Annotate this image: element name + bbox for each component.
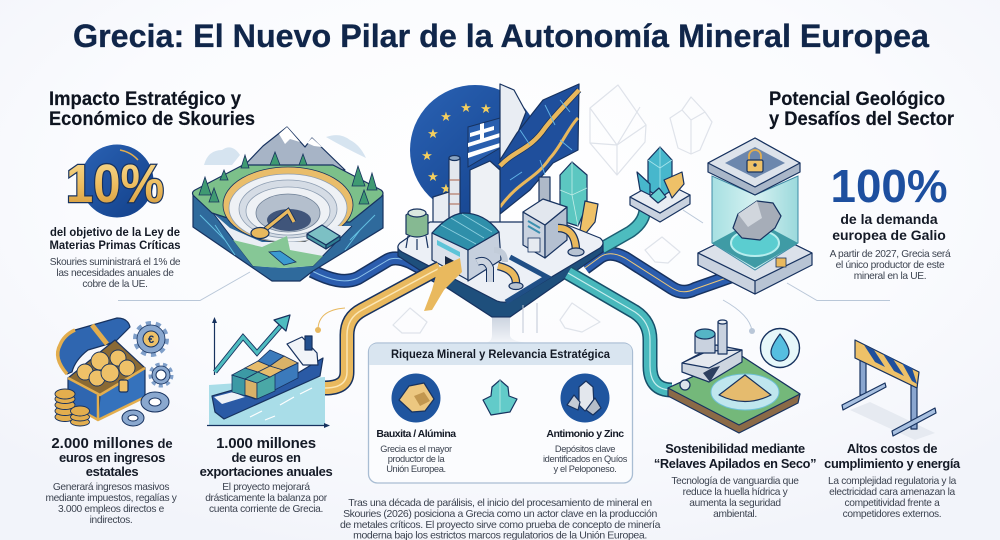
EU stars (421, 100, 492, 196)
coins (77, 350, 135, 386)
pipe: teal to dry stack (568, 273, 672, 390)
glass case (712, 176, 798, 270)
text: galio description: de la demanda (840, 211, 938, 227)
text: 2.000 millones: indirectos. (90, 515, 132, 526)
text: bauxite: Unión Europea. (386, 464, 446, 474)
containers (232, 350, 298, 399)
text: bauxite (376, 428, 456, 474)
growth arrow (215, 315, 290, 372)
pit terraces (223, 167, 353, 243)
text: summary paragraph: Tras una década de parálisis, el inicio del procesamiento de mineral en (348, 497, 652, 509)
chest interior (68, 340, 145, 395)
text: bauxite: Grecia es el mayor (380, 444, 452, 454)
green top (192, 165, 383, 222)
text: 10 percent description: Materias Primas Críticas (50, 238, 181, 252)
ground (668, 355, 800, 433)
text: high costs: Altos costos de (847, 441, 937, 456)
text: dry stacking (654, 441, 816, 520)
text: bauxite: productor de la (388, 454, 445, 464)
text: dry stacking: Sostenibilidad mediante (665, 441, 805, 456)
text: summary paragraph: Skouries (2026) posiciona a Grecia como un actor clave en la producción (343, 508, 657, 520)
padlock (747, 150, 763, 172)
text: high costs: cumplimiento y energía (824, 456, 961, 471)
text: 2.000 millones: 2.000 millones de (51, 435, 173, 452)
text: 1.000 millones: El proyecto mejorará (222, 482, 310, 493)
text: high costs: competidores externos. (843, 509, 941, 520)
blue shard with veins (500, 84, 579, 214)
icon: small crystal cluster on plinth (630, 147, 690, 222)
icon: antimony and zinc (560, 374, 610, 422)
EU circle (410, 85, 540, 215)
stem to central panel (483, 303, 538, 343)
text: antimony: Antimonio y Zinc (546, 428, 624, 440)
coin stacks (55, 389, 90, 426)
icon: cargo ship and growth chart (207, 315, 330, 428)
text: summary paragraph (340, 497, 661, 540)
text: 2.000 millones: euros en ingresos (59, 450, 165, 465)
text: high costs (824, 441, 961, 520)
icon: central crystal (483, 380, 517, 415)
gold pipe on building (558, 228, 584, 256)
lid (708, 138, 800, 195)
heading: right column: y Desafíos del Sector (769, 108, 954, 130)
heading: left column: Económico de Skouries (49, 108, 255, 130)
silver and gold pipes (477, 250, 523, 290)
channel veins (506, 257, 547, 302)
text: galio description (830, 211, 951, 282)
gold crystal (580, 201, 598, 233)
bridge (287, 337, 318, 365)
icon: open-pit mine island (192, 127, 383, 281)
icon: bauxite (392, 374, 440, 422)
EU stars: ★ (421, 148, 433, 163)
EU stars: ★ (427, 169, 439, 184)
sand pile (719, 375, 771, 402)
text: 1.000 millones: cuenta corriente de Grecia. (209, 504, 323, 515)
chest left face (68, 378, 100, 420)
icon: treasure chest and gears (55, 318, 172, 426)
text: antimony: y el Peloponeso. (554, 464, 616, 474)
keyhole plate (119, 380, 128, 392)
hull (212, 358, 323, 419)
text: 2.000 millones: 3.000 empleos directos e (58, 504, 165, 515)
rock (733, 201, 781, 240)
text: 2.000 millones: mediante impuestos, regalías y (45, 493, 178, 504)
axes (207, 320, 327, 426)
text: 2.000 millones: Generará ingresos masivos (53, 482, 169, 493)
pipe: upper teal (602, 208, 645, 248)
icon: central platform and factory (398, 84, 603, 317)
white crystal (500, 84, 526, 160)
stat: 100 percent: 100% (830, 160, 948, 212)
text: 1.000 millones: de euros en (231, 450, 301, 465)
text: 10 percent description (50, 225, 181, 290)
text: antimony (543, 428, 628, 474)
text: 10 percent description: del objetivo de la Ley de (50, 225, 180, 239)
panel: mineral wealth (368, 343, 632, 483)
text: 10 percent description: cobre de la UE. (82, 279, 148, 290)
heading: left column: Impacto Estratégico y (49, 88, 241, 110)
heading: right column: Potencial Geológico (769, 88, 945, 110)
gold callout line (315, 308, 345, 333)
panel title: Riqueza Mineral y Relevancia Estratégica (391, 347, 610, 361)
pale crystals (393, 85, 712, 333)
water drop badge (760, 328, 800, 368)
EU stars: ★ (427, 126, 439, 141)
side wall (193, 195, 383, 281)
trees (199, 152, 377, 204)
EU stars: ★ (440, 109, 452, 124)
pipes network (312, 208, 732, 292)
text: 10 percent description: Skouries suministrará el 1% de (50, 257, 181, 268)
panel header (369, 344, 632, 365)
text: high costs: electricidad cara amenazan la (829, 487, 956, 498)
funnel (305, 336, 312, 350)
base (698, 225, 812, 294)
text: antimony: Depósitos clave (555, 444, 615, 454)
text: dry stacking: reduce la huella hídrica y (683, 487, 789, 498)
connector lines (118, 210, 890, 334)
container building (307, 225, 340, 249)
mountains (240, 127, 345, 170)
title: Grecia: El Nuevo Pilar de la Autonomía Mineral Europea (73, 18, 929, 54)
hangar (432, 213, 501, 281)
icon: gallium vault (698, 138, 812, 294)
text: galio description: A partir de 2027, Grecia será (830, 249, 951, 260)
text: 10 percent description: las necesidades anuales de (56, 268, 174, 279)
platform top (398, 222, 603, 302)
heading: left column (49, 88, 255, 130)
text: high costs: La complejidad regulatoria y la (828, 476, 957, 487)
EU stars: ★ (440, 181, 452, 196)
pipe: dark blue left (312, 258, 440, 281)
text: summary paragraph: de metales críticos. El proyecto sirve como prueba de concepto de minería (340, 519, 661, 531)
text: dry stacking: Tecnología de vanguardia que (671, 476, 799, 487)
pipe: dark blue right (585, 254, 732, 292)
icon: road barrier (842, 340, 936, 440)
text: high costs: competitividad frente a (845, 498, 940, 509)
clouds (204, 147, 240, 165)
gear euro: € (148, 334, 154, 346)
pipe: gold to export (325, 258, 462, 388)
column behind right building (539, 177, 550, 209)
front floor (213, 213, 352, 268)
stat: 10 percent: 10% (66, 154, 164, 214)
text: dry stacking: “Relaves Apilados en Seco” (654, 456, 816, 471)
EU stars: ★ (460, 100, 472, 115)
text: galio description: mineral en la UE. (854, 271, 926, 282)
text: 1.000 millones (200, 435, 333, 515)
text: galio description: el único productor de este (836, 260, 945, 271)
plant body (680, 320, 742, 390)
teal crystal (560, 162, 587, 226)
text: bauxite: Bauxita / Alúmina (376, 428, 456, 440)
icon: dry stack tailings plant (668, 320, 800, 433)
Greek flag (468, 118, 500, 167)
text: antimony: identificados en Quíos (543, 454, 628, 464)
water (209, 377, 325, 425)
text: 1.000 millones: 1.000 millones (216, 435, 316, 452)
text: 2.000 millones: estatales (86, 464, 138, 479)
text: 1.000 millones: exportaciones anuales (200, 464, 333, 479)
green strip (233, 236, 323, 268)
EU stars: ★ (480, 101, 492, 116)
text: 2.000 millones (45, 435, 178, 526)
lid (58, 318, 130, 374)
chimney (449, 156, 460, 226)
water ring (711, 374, 779, 410)
chest right face (98, 368, 145, 420)
right building (523, 199, 567, 258)
heading: right column (769, 88, 954, 130)
excavator (251, 211, 294, 238)
tank (406, 209, 428, 250)
small gears (122, 364, 172, 426)
solar panel (269, 251, 296, 265)
text: dry stacking: ambiental. (713, 509, 757, 520)
text: 1.000 millones: drásticamente la balanza por (205, 493, 328, 504)
text: dry stacking: aumenta la seguridad (689, 498, 781, 509)
text: galio description: europea de Galio (832, 227, 946, 243)
platform side (398, 243, 603, 317)
back blocks (433, 190, 460, 235)
